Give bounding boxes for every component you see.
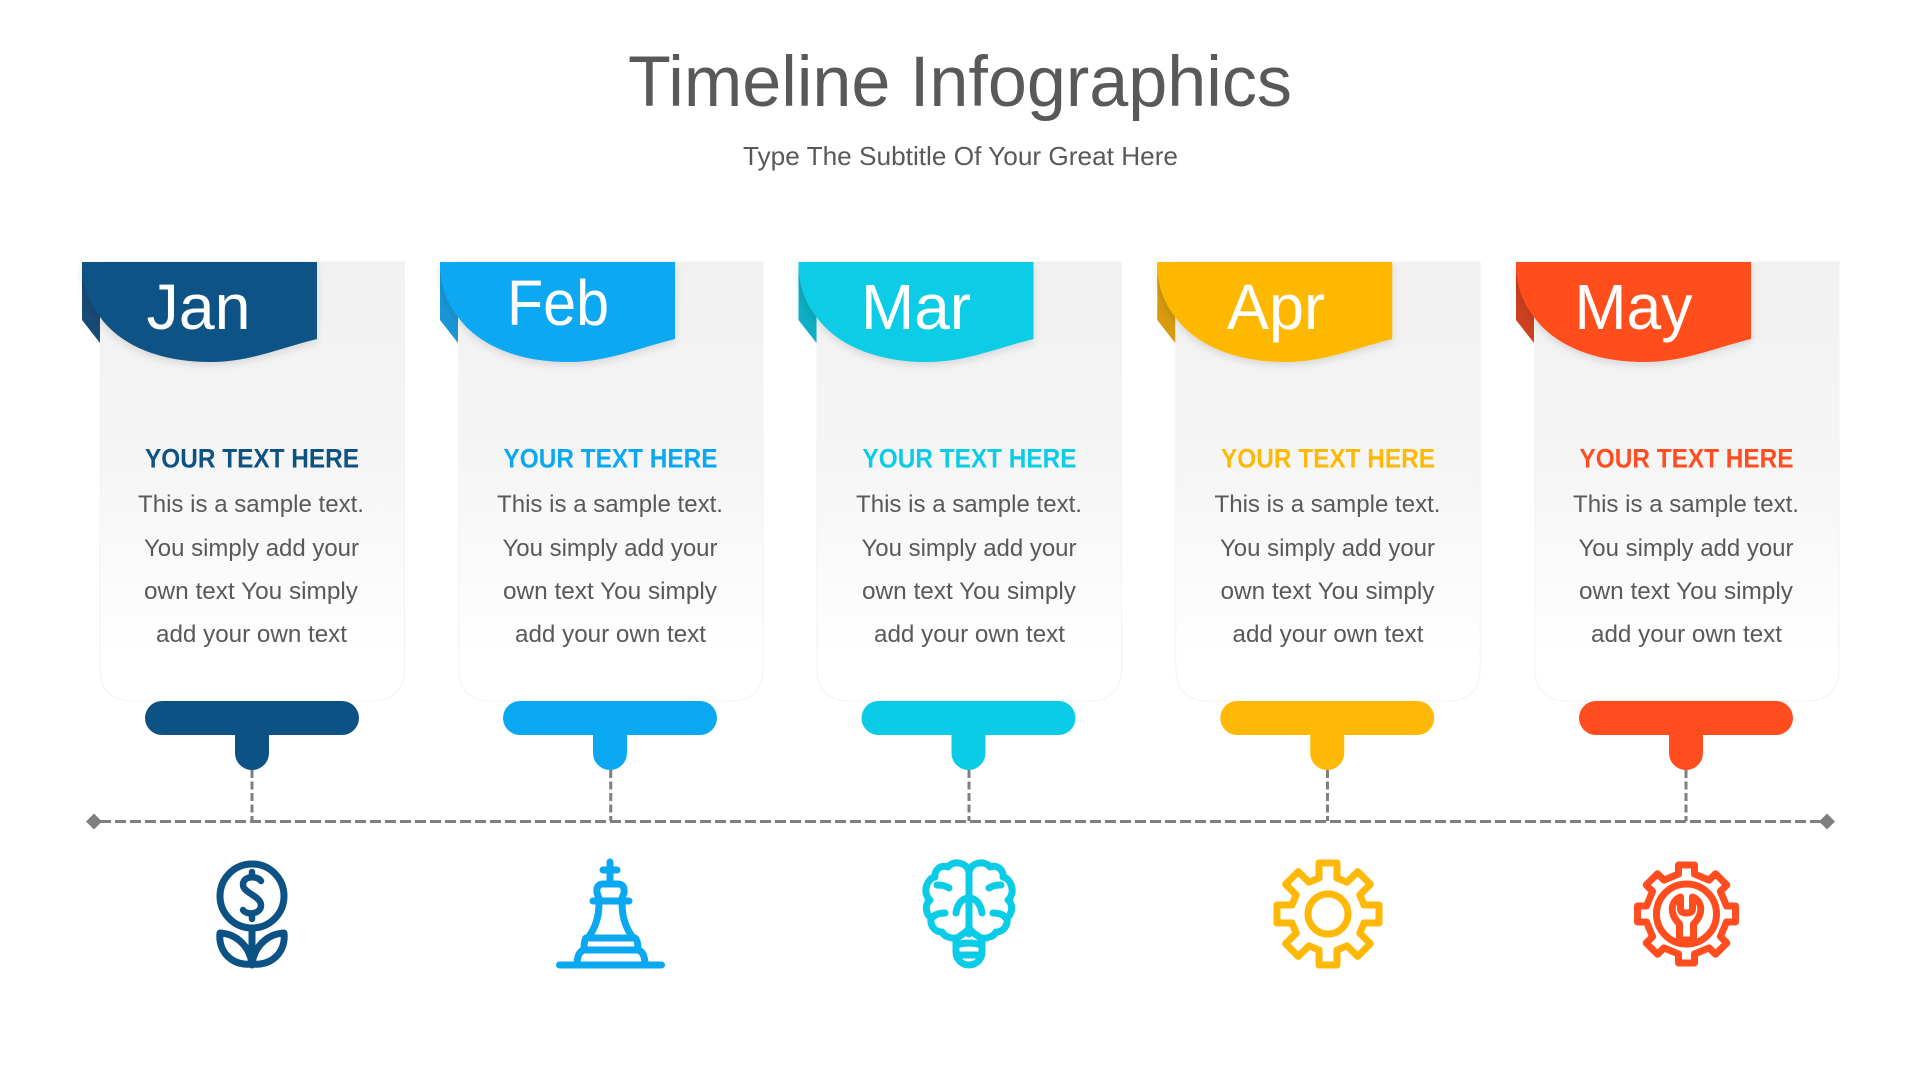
- month ribbon: [1157, 262, 1392, 362]
- month ribbon: [1516, 262, 1751, 362]
- icon: gear with wrench: [1638, 865, 1736, 963]
- body text: own text You simply: [503, 578, 717, 605]
- timeline axis: [86, 814, 1835, 830]
- body text: [497, 491, 723, 648]
- connector tab: [1220, 701, 1434, 770]
- panel: Jan: [82, 262, 404, 965]
- body text: add your own text: [874, 621, 1065, 648]
- heading: YOUR TEXT HERE: [862, 444, 1076, 474]
- connector tab: [145, 701, 359, 770]
- heading: YOUR TEXT HERE: [145, 444, 359, 474]
- icon: chess king: [560, 862, 662, 965]
- body text: own text You simply: [1220, 578, 1434, 605]
- body text: add your own text: [156, 621, 347, 648]
- ribbon fold: [1516, 262, 1534, 343]
- heading: YOUR TEXT HERE: [1221, 444, 1435, 474]
- connector tab: [862, 701, 1076, 770]
- heading: YOUR TEXT HERE: [1580, 444, 1794, 474]
- body text: You simply add your: [862, 535, 1076, 562]
- connector tab: [503, 701, 717, 770]
- connector dashes: [609, 770, 612, 821]
- card: [1535, 262, 1839, 701]
- month label: Feb: [507, 267, 609, 339]
- card: [100, 262, 404, 701]
- body text: [856, 491, 1082, 648]
- panel: Mar: [798, 262, 1122, 965]
- panel: Feb: [440, 262, 763, 965]
- connector dashes: [968, 770, 970, 821]
- ribbon fold: [82, 262, 100, 343]
- body text: This is a sample text.: [856, 491, 1082, 518]
- month ribbon: [798, 262, 1034, 362]
- panel: May: [1516, 262, 1839, 963]
- connector dashes: [1684, 770, 1688, 821]
- body text: You simply add your: [1578, 535, 1794, 562]
- body text: [138, 491, 364, 648]
- month label: Mar: [861, 271, 971, 343]
- body text: add your own text: [1232, 621, 1424, 648]
- connector tab: [1579, 701, 1793, 770]
- body text: add your own text: [1591, 621, 1782, 648]
- ribbon fold: [798, 262, 816, 343]
- card: [1176, 262, 1480, 701]
- month label: Apr: [1227, 271, 1325, 343]
- body text: add your own text: [515, 621, 706, 648]
- body text: This is a sample text.: [138, 491, 364, 518]
- connector dashes: [250, 770, 254, 821]
- connector dashes: [1326, 770, 1329, 821]
- card: [817, 262, 1122, 701]
- body text: This is a sample text.: [1214, 491, 1440, 518]
- body text: [1573, 491, 1799, 648]
- body text: You simply add your: [144, 535, 359, 562]
- month ribbon: [82, 262, 317, 362]
- body text: You simply add your: [502, 535, 718, 562]
- card: [459, 262, 763, 701]
- body text: [1214, 491, 1440, 648]
- panel: Apr: [1157, 262, 1480, 965]
- month label: Jan: [146, 271, 250, 343]
- ribbon fold: [1157, 262, 1175, 343]
- icon: brain bulb: [926, 863, 1012, 965]
- body text: You simply add your: [1220, 535, 1435, 562]
- icon: gear: [1277, 863, 1379, 965]
- body text: own text You simply: [1579, 578, 1793, 605]
- month ribbon: [440, 262, 675, 362]
- body text: own text You simply: [862, 578, 1076, 605]
- body text: This is a sample text.: [497, 491, 723, 518]
- body text: This is a sample text.: [1573, 491, 1799, 518]
- ribbon fold: [440, 262, 458, 343]
- subtitle: Type The Subtitle Of Your Great Here: [743, 141, 1178, 171]
- heading: YOUR TEXT HERE: [504, 444, 718, 474]
- icon: money plant: [220, 864, 284, 965]
- body text: own text You simply: [144, 578, 358, 605]
- title: Timeline Infographics: [628, 43, 1292, 122]
- month label: May: [1574, 271, 1692, 343]
